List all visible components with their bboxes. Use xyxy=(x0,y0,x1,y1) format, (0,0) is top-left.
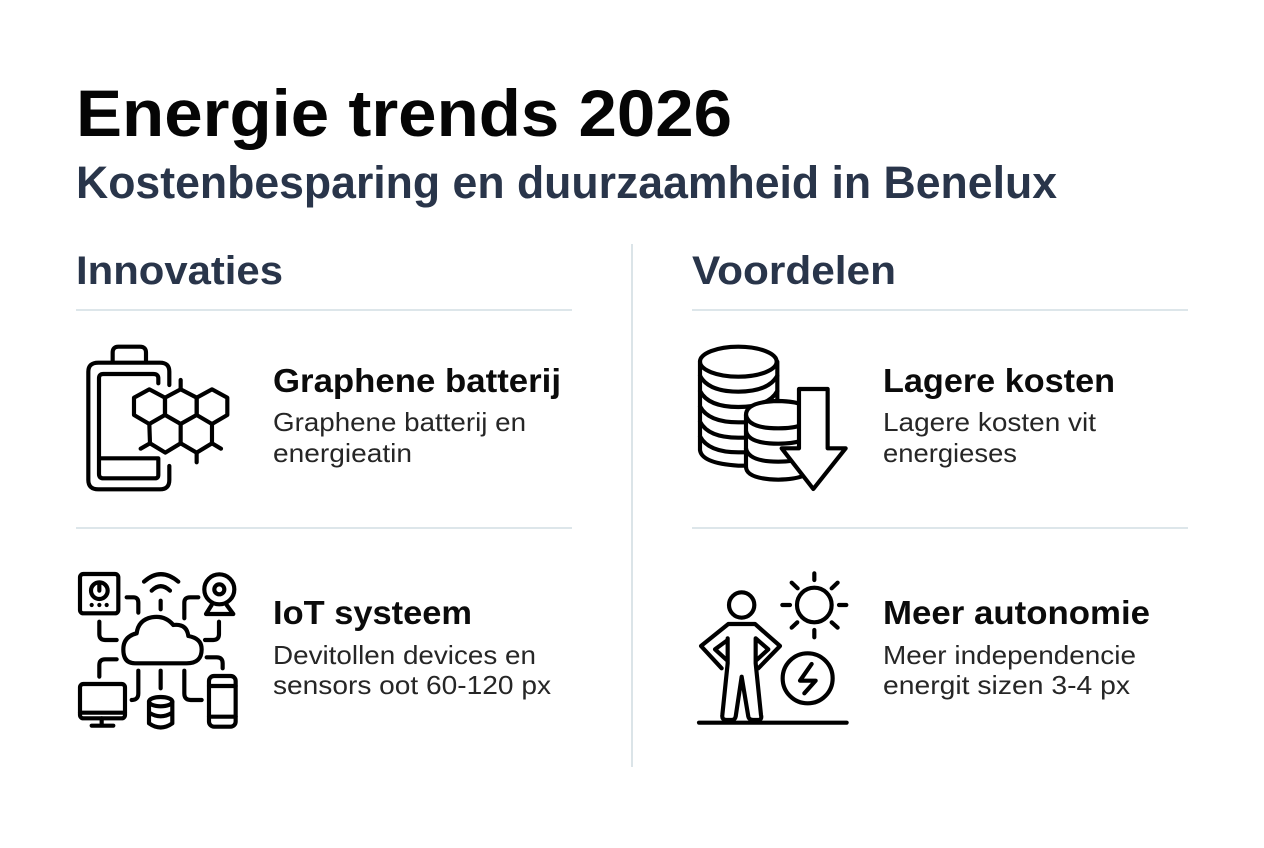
item text: iot systeem: sensors oot 60-120 px xyxy=(273,670,551,700)
item text: graphene batterij: Graphene batterij en xyxy=(273,407,526,437)
item text: lagere kosten: Lagere kosten vit xyxy=(883,407,1097,437)
icon: coins with down arrow xyxy=(700,347,846,489)
item text: lagere kosten xyxy=(883,362,1115,468)
icon: person with sun and energy xyxy=(699,573,847,723)
item text: lagere kosten: Lagere kosten xyxy=(883,362,1115,399)
item text: iot systeem: IoT systeem xyxy=(273,594,472,631)
icon: graphene battery xyxy=(88,347,227,489)
title: Energie trends 2026 xyxy=(76,76,732,150)
panel: innovaties xyxy=(76,249,572,727)
icon: iot network xyxy=(80,574,236,727)
heading: innovaties: Innovaties xyxy=(76,249,283,293)
subtitle: Kostenbesparing en duurzaamheid in Benelux xyxy=(76,157,1057,208)
item text: graphene batterij xyxy=(273,362,561,468)
item text: lagere kosten: energieses xyxy=(883,438,1017,468)
heading: voordelen: Voordelen xyxy=(692,249,896,293)
item text: iot systeem xyxy=(273,594,551,700)
item text: meer autonomie: energit sizen 3-4 px xyxy=(883,670,1130,700)
item text: iot systeem: Devitollen devices en xyxy=(273,640,536,670)
panel: voordelen xyxy=(692,249,1188,723)
item text: graphene batterij: Graphene batterij xyxy=(273,362,561,399)
item text: meer autonomie xyxy=(883,594,1150,700)
item text: meer autonomie: Meer autonomie xyxy=(883,594,1150,631)
item text: graphene batterij: energieatin xyxy=(273,438,412,468)
item text: meer autonomie: Meer independencie xyxy=(883,640,1136,670)
